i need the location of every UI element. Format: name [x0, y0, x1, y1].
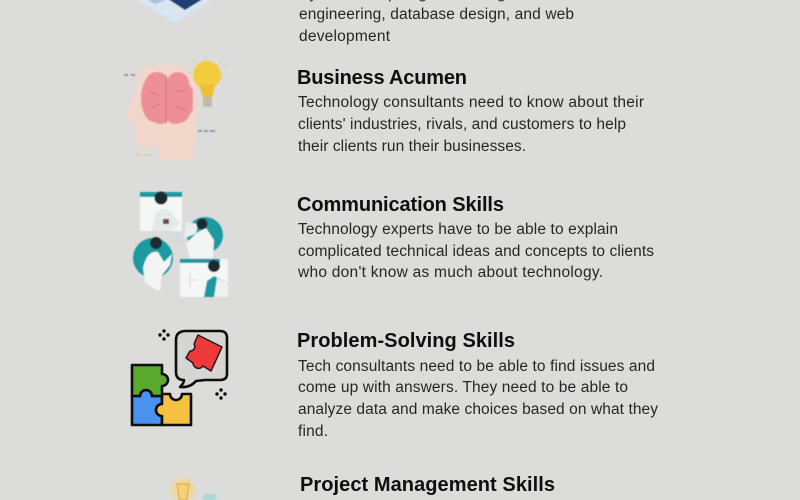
head — [125, 64, 198, 160]
section: business acumen: Technology consultants need to know about their — [298, 94, 644, 111]
sparkles — [158, 329, 227, 400]
icon: project management bulb — [172, 479, 216, 500]
dashes — [124, 74, 135, 76]
section: business acumen: Business Acumen — [297, 67, 467, 89]
section: business acumen — [297, 67, 644, 155]
section: communication skills: Technology experts have to be able to explain — [298, 221, 618, 238]
section: business acumen: their clients run their businesses. — [298, 138, 526, 155]
icon: puzzle pieces and speech bubble — [132, 329, 227, 425]
section: business acumen: clients' industries, rivals, and customers to help — [298, 116, 626, 133]
section: communication skills: who don't know as much about technology. — [297, 264, 603, 281]
light bulb — [193, 61, 221, 89]
section: problem-solving skills: Tech consultants need to be able to find issues and — [298, 358, 655, 375]
yellow puzzle piece — [156, 394, 191, 425]
section: problem-solving skills — [297, 330, 658, 440]
text block: technical skills continuation — [299, 0, 599, 45]
section: problem-solving skills: analyze data and make choices based on what they — [298, 401, 658, 418]
section: problem-solving skills: Problem-Solving Skills — [297, 330, 515, 352]
icon: people communicating — [133, 192, 228, 297]
bottom card — [180, 259, 228, 297]
section: communication skills: Communication Skills — [297, 194, 504, 216]
section: problem-solving skills: come up with answers. They need to be able to — [298, 379, 628, 396]
blue puzzle piece — [132, 390, 162, 425]
speech bubble — [176, 331, 227, 387]
heading: project management skills: Project Management Skills — [300, 474, 555, 496]
text block: technical skills continuation: development — [299, 28, 391, 45]
text block: technical skills continuation: engineering, database design, and web — [299, 6, 574, 23]
top card — [140, 192, 182, 231]
section: communication skills: complicated technical ideas and concepts to clients — [298, 243, 654, 260]
right circle person — [187, 217, 223, 253]
brain — [141, 72, 193, 124]
section: communication skills — [297, 194, 654, 281]
icon: head with brain and light bulb — [124, 54, 228, 160]
red puzzle piece — [186, 335, 222, 371]
icon: laptop — [135, 0, 214, 22]
left circle person — [133, 238, 173, 278]
section: problem-solving skills: find. — [298, 423, 328, 440]
green puzzle piece — [132, 365, 168, 396]
